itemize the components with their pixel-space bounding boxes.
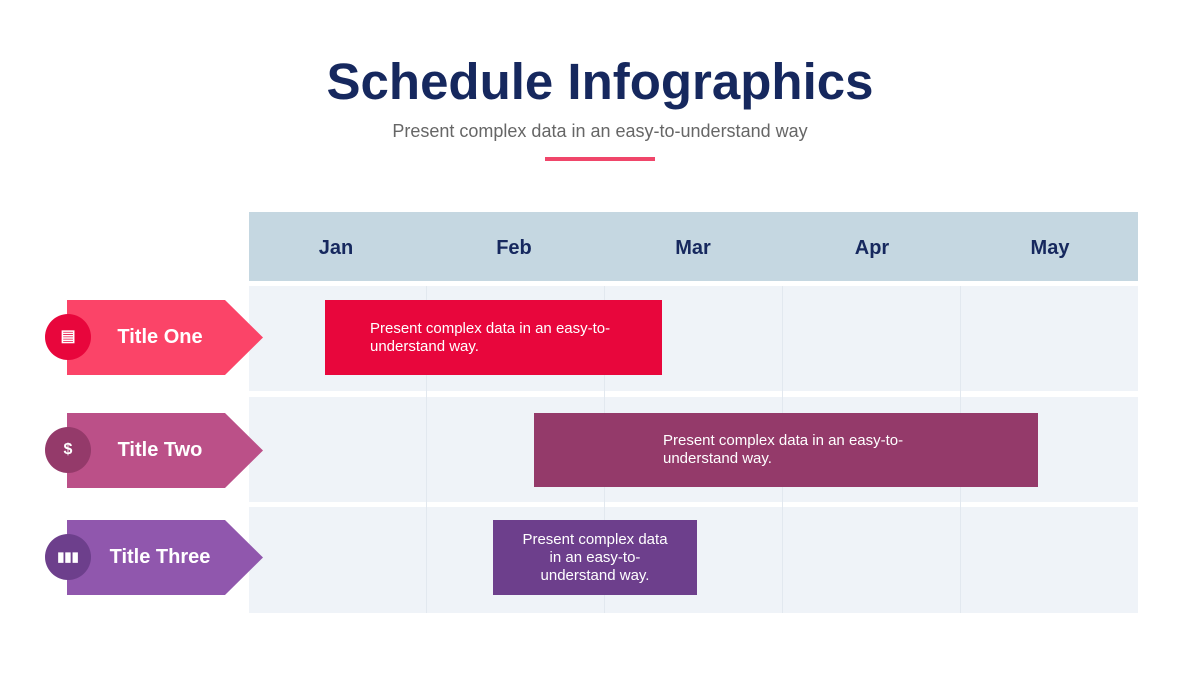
bar one: Present complex data in an easy-to-understand way. (370, 320, 610, 354)
icon: money hand: $ (64, 441, 72, 458)
month labels (319, 237, 1070, 259)
icon: chart (45, 534, 91, 580)
icon: document (45, 314, 91, 360)
subtitle: Present complex data in an easy-to-understand way (392, 121, 808, 141)
month labels: Mar (675, 237, 711, 259)
label: Title Two (67, 413, 263, 488)
icon: document: ▤ (60, 328, 76, 345)
month labels: May (1031, 237, 1069, 259)
icon: money hand (45, 427, 91, 473)
month labels: Jan (319, 237, 353, 259)
label: Title Two: Title Two (118, 439, 202, 461)
month labels: Feb (496, 237, 532, 259)
month header (249, 212, 1138, 281)
row backgrounds (249, 286, 1138, 613)
label: Title One: Title One (117, 326, 203, 348)
bar two (534, 413, 1038, 487)
accent underline (545, 157, 655, 161)
bar two: Present complex data in an easy-to-understand way. (663, 432, 903, 467)
bar three: Present complex data in an easy-to-understand way. (522, 530, 668, 584)
label: Title Three (67, 520, 263, 595)
title: Schedule Infographics (327, 53, 873, 110)
label: Title One (67, 300, 263, 375)
icon: chart: ▮▮▮ (57, 549, 79, 564)
month labels: Apr (855, 237, 889, 259)
bar one (325, 300, 662, 375)
bar three (493, 520, 697, 595)
label: Title Three: Title Three (110, 546, 210, 568)
